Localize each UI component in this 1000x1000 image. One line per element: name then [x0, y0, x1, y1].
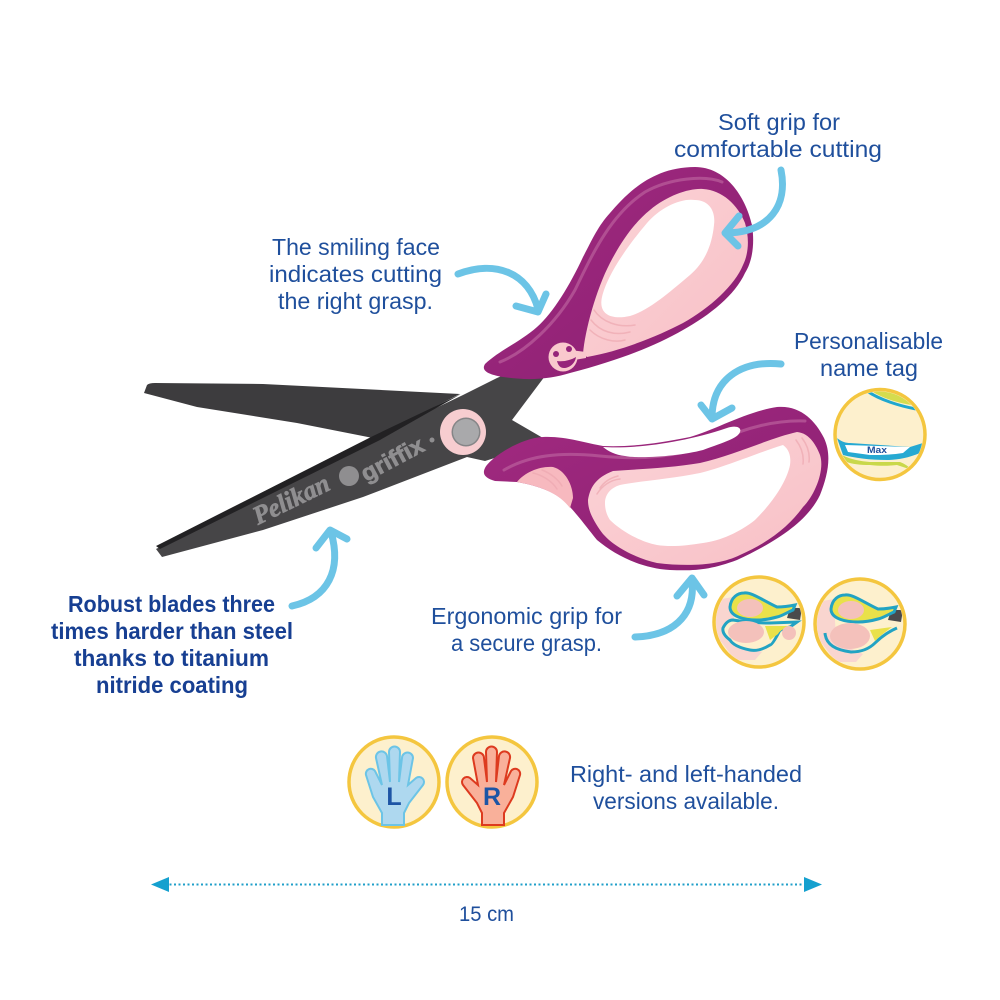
arrow: ergonomic	[635, 578, 704, 637]
icon: left hand	[349, 737, 439, 827]
callout: soft grip	[674, 109, 882, 246]
icon: name tag detail circle	[835, 386, 925, 480]
lower handle	[484, 407, 828, 570]
callout: smiling face	[269, 234, 546, 314]
callout: smiling face: indicates cutting	[269, 261, 442, 287]
icon: right hand	[447, 737, 537, 827]
callout: smiling face: The smiling face	[272, 234, 440, 260]
callout: soft grip: comfortable cutting	[674, 136, 882, 162]
callout: robust blades: Robust blades three	[68, 591, 275, 617]
dimension arrow: 15 cm	[151, 877, 822, 926]
icon: smiling face	[548, 342, 586, 372]
callout: smiling face: the right grasp.	[278, 288, 433, 314]
icon: grasp example one	[714, 577, 804, 667]
callout: ergonomic grip: Ergonomic grip for	[431, 603, 622, 629]
callout: name tag: Personalisable	[794, 328, 943, 354]
text: handed versions: Right- and left-handed	[570, 761, 802, 787]
callout: ergonomic grip	[431, 578, 704, 656]
callout: soft grip: Soft grip for	[718, 109, 840, 135]
callout: name tag	[701, 328, 943, 419]
callout: robust blades	[51, 530, 347, 698]
scissors illustration	[144, 167, 828, 570]
arrow: smiling face	[458, 268, 546, 312]
letter L: L	[386, 783, 402, 811]
dimension label: 15 cm	[459, 903, 514, 926]
icon: name tag detail circle: Max	[867, 445, 887, 455]
lower blade with brand text: Pelikan	[247, 468, 334, 531]
arrow: soft grip	[725, 170, 782, 246]
lower blade with brand text	[156, 368, 545, 557]
lower blade with brand text: griffix	[356, 431, 429, 486]
text: handed versions	[570, 761, 802, 814]
pivot screw	[440, 409, 486, 455]
icon: grasp example two	[815, 579, 905, 669]
upper blade	[144, 383, 460, 438]
text: handed versions: versions available.	[593, 788, 779, 814]
callout: name tag: name tag	[820, 355, 918, 381]
callout: robust blades: nitride coating	[96, 672, 248, 698]
arrow: name tag	[701, 363, 781, 419]
arrow: blades	[292, 530, 347, 606]
upper handle	[484, 167, 753, 379]
callout: ergonomic grip: a secure grasp.	[451, 630, 602, 656]
callout: robust blades: times harder than steel	[51, 618, 293, 644]
letter R: R	[483, 783, 501, 811]
callout: robust blades: thanks to titanium	[74, 645, 269, 671]
